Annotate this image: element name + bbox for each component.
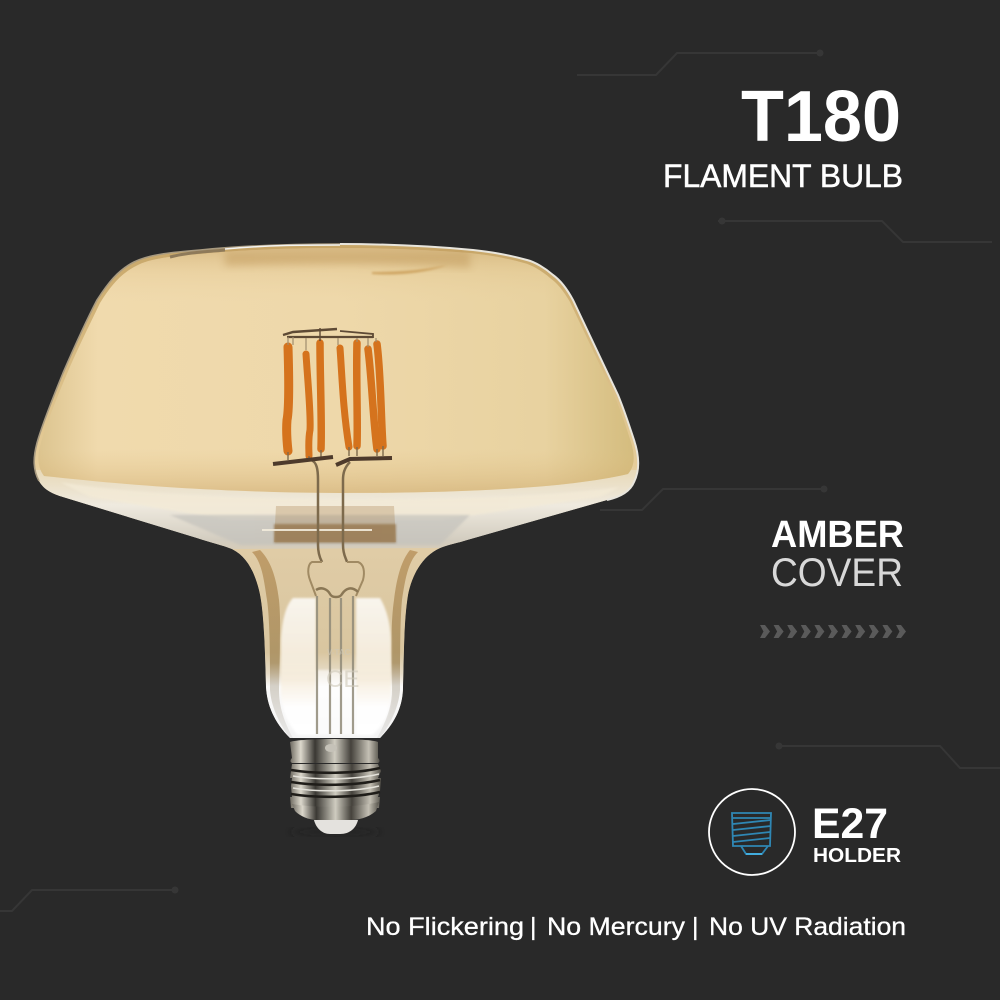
footer text: | bbox=[530, 913, 536, 941]
amber upper body bbox=[38, 248, 634, 493]
CE marking on neck: CE bbox=[326, 666, 359, 693]
top darker band bbox=[225, 252, 470, 268]
glass silhouette bbox=[34, 244, 638, 738]
label: AMBER: AMBER bbox=[771, 514, 904, 556]
label: HOLDER: HOLDER bbox=[813, 845, 902, 867]
lower clear skirt bbox=[30, 470, 640, 570]
central neck bbox=[232, 548, 440, 738]
icon: E27 holder bbox=[709, 789, 795, 875]
glass stem and mount bbox=[308, 460, 364, 734]
filament wire frame bbox=[273, 328, 392, 465]
reflection band below amber bbox=[68, 484, 472, 514]
grey lower reflection bbox=[170, 515, 470, 545]
label: COVER: COVER bbox=[771, 551, 903, 595]
bulb shadow bbox=[290, 829, 380, 835]
label: E27: E27 bbox=[812, 800, 888, 848]
title: T180: T180 bbox=[741, 77, 901, 157]
chevron row bbox=[760, 625, 906, 638]
subtitle: FLAMENT BULB: FLAMENT BULB bbox=[663, 158, 903, 194]
footer text: No Mercury bbox=[547, 913, 686, 941]
CE marking on neck bbox=[326, 648, 359, 693]
neck side shading bbox=[252, 550, 293, 738]
footer text: No UV Radiation bbox=[709, 913, 906, 941]
filaments bbox=[287, 343, 383, 456]
bulb bbox=[30, 244, 640, 835]
footer text bbox=[366, 913, 906, 941]
glass rim highlights bbox=[34, 244, 340, 481]
footer text: No Flickering bbox=[366, 913, 524, 941]
reflected flat rectangle behind stems bbox=[274, 506, 396, 542]
neck bright interior bbox=[281, 598, 316, 735]
CE marking on neck: V-TAC bbox=[327, 648, 351, 657]
footer text: | bbox=[692, 913, 698, 941]
metal screw base E27 bbox=[290, 739, 381, 834]
